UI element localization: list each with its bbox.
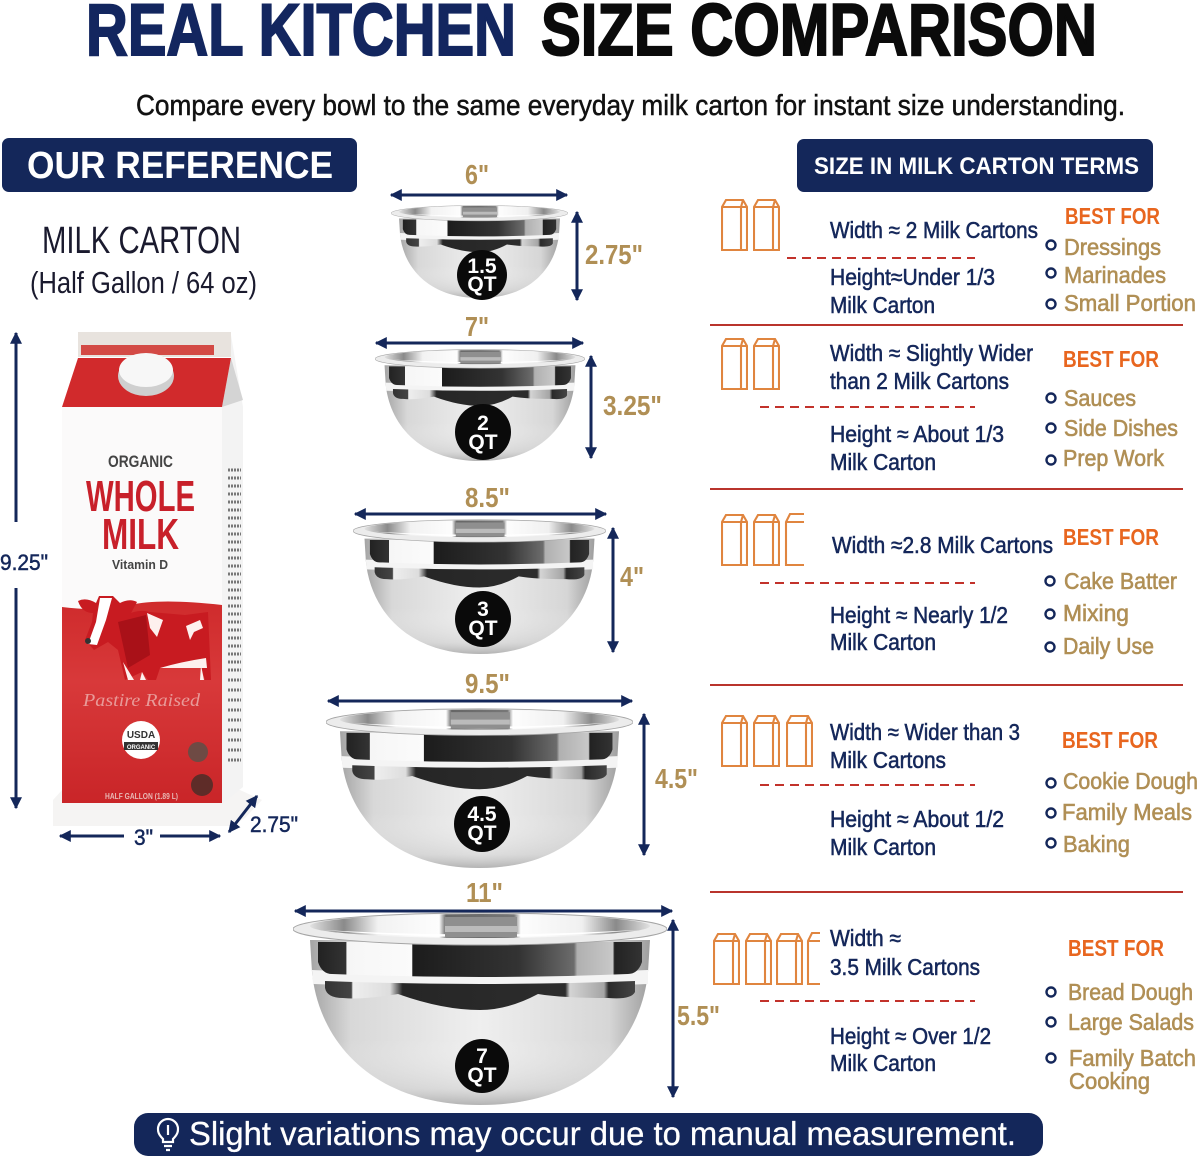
subtitle: Compare every bowl to the same everyday milk carton for instant size understanding. xyxy=(136,90,1125,122)
bowl: 7 QT: 11" xyxy=(466,877,503,908)
row: 7 QT size terms xyxy=(714,925,1196,1094)
milk carton illustration: Pastire Raised xyxy=(82,690,201,710)
bowl: 2 QT: 3.25" xyxy=(603,390,662,421)
title xyxy=(86,0,1097,71)
width and height text: Milk Carton xyxy=(830,834,936,860)
width and height text: Height ≈ Nearly 1/2 xyxy=(830,602,1008,628)
width and height text: Width ≈ 2 Milk Cartons xyxy=(830,217,1038,243)
bowl: 4.5 QT xyxy=(326,668,698,868)
best for list: BEST FOR xyxy=(1065,203,1160,229)
best for list: Daily Use xyxy=(1063,633,1154,659)
milk carton illustration xyxy=(53,332,262,826)
best for list: Cake Batter xyxy=(1064,568,1177,594)
best for list: Mixing xyxy=(1063,600,1129,626)
usda seal: ORGANIC xyxy=(127,745,156,751)
best for list xyxy=(1046,203,1196,316)
best for list: BEST FOR xyxy=(1062,727,1158,753)
width and height text: Width ≈ Slightly Wider xyxy=(830,340,1033,366)
best for list: Dressings xyxy=(1064,234,1161,260)
bowl: 2 QT: QT xyxy=(468,431,498,454)
icon: two cartons xyxy=(722,339,779,389)
best for list: Baking xyxy=(1063,831,1130,857)
row: 3 QT size terms xyxy=(722,514,1177,659)
bowl: 7 QT: QT xyxy=(467,1064,497,1087)
milk carton label: MILK CARTON xyxy=(42,220,241,262)
width and height text: Width ≈ xyxy=(830,925,901,951)
best for list: Sauces xyxy=(1064,385,1136,411)
bowl: 4.5 QT: QT xyxy=(467,822,497,845)
width and height text: Milk Carton xyxy=(830,1050,936,1076)
width and height text xyxy=(787,217,1038,318)
heading pill: our reference: OUR REFERENCE xyxy=(27,145,333,187)
width and height text: Milk Cartons xyxy=(830,747,946,773)
panel: our reference xyxy=(0,138,357,850)
cow xyxy=(78,596,211,680)
best for list xyxy=(1046,935,1196,1094)
icon: 2.8 cartons xyxy=(722,514,804,565)
bowl: 2 QT: 2 xyxy=(477,412,489,435)
bowl: 1.5 QT: 2.75" xyxy=(585,239,643,270)
width and height text: 3.5 Milk Cartons xyxy=(830,954,980,980)
bowl: 2 QT: 7" xyxy=(465,311,489,342)
carton side print xyxy=(228,470,241,760)
best for list: BEST FOR xyxy=(1068,935,1164,961)
best for list: Side Dishes xyxy=(1064,415,1178,441)
icon: light bulb xyxy=(158,1119,178,1150)
bowl: 1.5 QT: 6" xyxy=(465,159,489,190)
best for list: Small Portion xyxy=(1064,290,1196,316)
width and height text: Width ≈ Wider than 3 xyxy=(830,719,1020,745)
bowl: 1.5 QT: 1.5 xyxy=(467,255,497,278)
best for list xyxy=(1046,346,1178,471)
milk carton label xyxy=(30,220,257,300)
dimension: carton width 3: 3" xyxy=(134,825,153,850)
width and height text xyxy=(760,719,1020,860)
bowl: 2 QT xyxy=(375,311,662,461)
bowl: 3 QT: QT xyxy=(468,617,498,640)
width and height text: Height ≈ Over 1/2 xyxy=(830,1023,991,1049)
bowl: 4.5 QT: 9.5" xyxy=(465,668,510,699)
bowl: 3 QT: 8.5" xyxy=(465,482,510,513)
carton text: ORGANIC xyxy=(108,452,173,471)
row: 1.5 QT size terms xyxy=(722,200,1196,318)
width and height text: than 2 Milk Cartons xyxy=(830,368,1009,394)
width and height text: Height ≈ About 1/2 xyxy=(830,806,1004,832)
width and height text: Width ≈2.8 Milk Cartons xyxy=(832,532,1053,558)
best for list: BEST FOR xyxy=(1063,524,1159,550)
milk carton label: (Half Gallon / 64 oz) xyxy=(30,265,257,300)
bowl: 4.5 QT: 4.5" xyxy=(655,763,698,794)
milk carton illustration: WHOLE xyxy=(86,472,195,521)
usda seal xyxy=(122,721,160,759)
bowl: 7 QT: 7 xyxy=(476,1045,488,1068)
bowl: 7 QT xyxy=(293,877,720,1105)
best for list: Prep Work xyxy=(1063,445,1164,471)
best for list: Large Salads xyxy=(1068,1009,1194,1035)
row: 2 QT size terms xyxy=(722,339,1178,475)
heading pill: size in milk carton terms xyxy=(797,139,1153,192)
dimension: carton depth 2.75 xyxy=(229,796,298,837)
width and height text: Height ≈ About 1/3 xyxy=(830,421,1004,447)
best for list: Bread Dough xyxy=(1068,979,1193,1005)
usda seal: USDA xyxy=(127,730,155,741)
best for list: Marinades xyxy=(1064,262,1166,288)
best for list: Cooking xyxy=(1069,1068,1150,1094)
width and height text xyxy=(760,532,1053,655)
heading pill: size in milk carton terms: SIZE IN MILK CARTON TERMS xyxy=(814,153,1139,180)
width and height text: Milk Carton xyxy=(830,629,936,655)
best for list: BEST FOR xyxy=(1063,346,1159,372)
dimension: carton height 9.25: 9.25" xyxy=(0,550,48,575)
dimension: carton depth 2.75: 2.75" xyxy=(250,812,298,837)
bowl: 1.5 QT: QT xyxy=(467,273,497,296)
bowl: 1.5 QT xyxy=(391,159,643,300)
width and height text: Milk Carton xyxy=(830,292,935,318)
best for list: Family Meals xyxy=(1062,799,1192,825)
icon: 3.5 cartons xyxy=(714,933,820,984)
icon: three cartons xyxy=(722,716,812,766)
width and height text: Height≈Under 1/3 xyxy=(830,264,995,290)
width and height text xyxy=(760,925,991,1076)
best for list xyxy=(1046,524,1177,659)
width and height text xyxy=(760,340,1033,475)
bowl: 3 QT: 3 xyxy=(477,598,489,621)
best for list: Family Batch xyxy=(1069,1045,1196,1071)
milk carton illustration: HALF GALLON (1.89 L) xyxy=(105,792,178,801)
milk carton illustration: Vitamin D xyxy=(112,557,168,572)
bowl: 7 QT: 5.5" xyxy=(677,1000,720,1031)
width and height text: Milk Carton xyxy=(830,449,936,475)
cap xyxy=(118,356,174,396)
bowl: 3 QT xyxy=(353,482,644,654)
icon: two cartons xyxy=(722,200,779,250)
row: 4.5 QT size terms xyxy=(722,716,1198,860)
bowl: 4.5 QT: 4.5 xyxy=(467,803,497,826)
milk carton illustration: MILK xyxy=(102,510,179,559)
footer note: Slight variations may occur due to manual measurement. xyxy=(189,1115,1016,1152)
bowl: 3 QT: 4" xyxy=(620,561,644,592)
best for list xyxy=(1046,727,1198,857)
